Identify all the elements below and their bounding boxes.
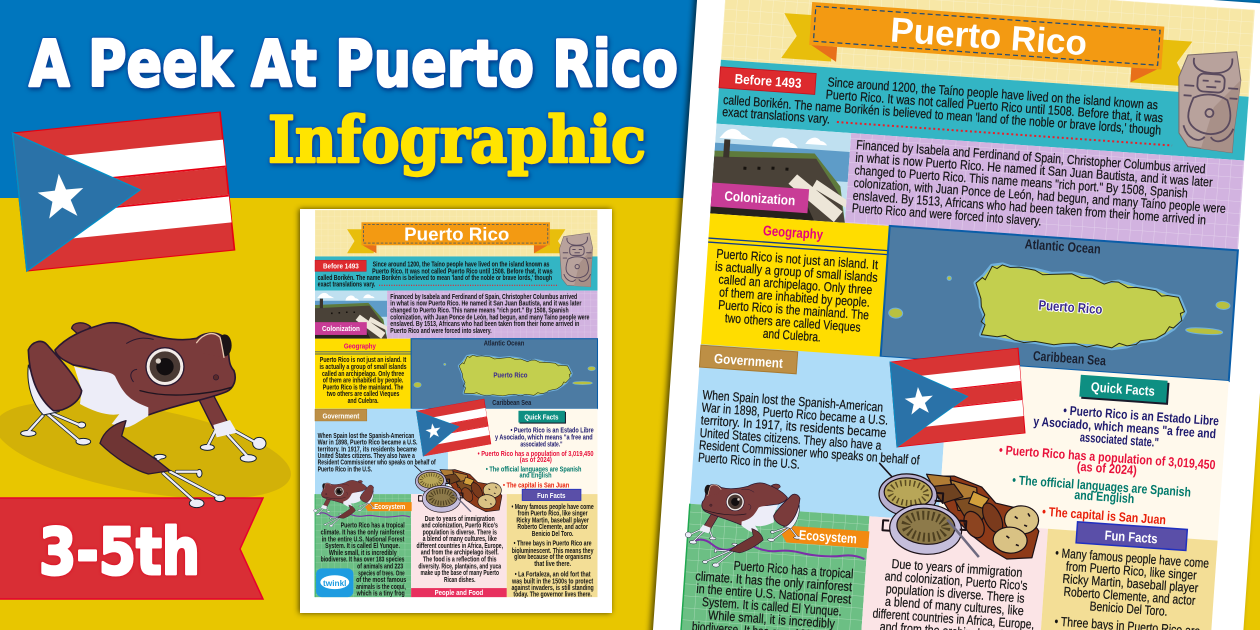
thumbnail people and food text: a blend of many cultures, like	[423, 536, 497, 543]
grade label: 3-5th	[39, 516, 200, 590]
text: colonization: changed to Puerto Rico. This name means "rich port." By 1508, Spanish	[854, 162, 1188, 201]
frog on poster	[683, 478, 804, 573]
text: people and food: Due to years of immigration	[891, 556, 1023, 580]
thumbnail before 1493 text	[318, 262, 553, 288]
thumbnail quick facts text	[478, 428, 594, 489]
thumbnail section labels: twinkl	[323, 578, 347, 588]
thumbnail ecosystem text: animals is the coquí,	[356, 584, 406, 591]
text: before 1493: exact translations vary.	[722, 104, 831, 127]
thumbnail section labels: Ecosystem	[374, 502, 405, 511]
thumbnail geography text: Puerto Rico is the mainland. The	[323, 384, 403, 391]
panel: geography	[701, 213, 890, 358]
thumbnail before 1493 text: Puerto Rico. It was not called Puerto Rico until 1508. Before that, it was	[372, 268, 553, 275]
header ribbon	[781, 0, 1193, 87]
label box: colonization	[711, 182, 809, 213]
icon: Puerto Rico flag	[12, 112, 234, 271]
label: before 1493: Before 1493	[734, 71, 802, 91]
label: fun facts: Fun Facts	[1104, 528, 1158, 546]
thumbnail colonization text: Financed by Isabela and Ferdinand of Spain, Christopher Columbus arrived	[390, 294, 577, 301]
thumbnail section labels: Before 1493	[323, 261, 359, 270]
text: quick facts: • The capital is San Juan	[1042, 504, 1166, 527]
thumbnail ecosystem text: Puerto Rico has a tropical	[341, 523, 405, 530]
text: quick facts: associated state."	[1079, 429, 1159, 450]
poster title text: Puerto Rico	[889, 11, 1088, 63]
thumbnail people and food text	[416, 516, 503, 584]
text: quick facts: • The official languages are Spanish	[1012, 472, 1191, 500]
text: before 1493: called Borikén. The name Borikén is believed to mean 'land of the noble or brave lords,' though	[723, 92, 1162, 138]
thumbnail ecosystem text: species of trees. One	[358, 570, 405, 577]
thumbnail fun facts text: Benicio Del Toro.	[532, 531, 573, 538]
thumbnail section labels: Geography	[344, 341, 377, 350]
thumbnail quick facts text: • The capital is San Juan	[503, 482, 569, 489]
text: fun facts	[1050, 545, 1210, 630]
panel: header background	[721, 0, 1255, 97]
map: small islands	[889, 273, 1230, 341]
thumbnail ecosystem text: which is a tiny frog	[356, 591, 405, 598]
text: before 1493	[722, 67, 1165, 150]
thumbnail ecosystem text	[321, 523, 406, 598]
label box: quick facts	[1079, 375, 1170, 405]
thumbnail government text: Puerto Rico in the U.S.	[318, 466, 372, 473]
label box: ecosystem	[780, 525, 869, 548]
red dotted divider	[837, 122, 1172, 145]
thumbnail geography text: and Culebra.	[348, 398, 379, 405]
thumbnail before 1493 text: called Borikén. The name Borikén is believed to mean 'land of the noble or brave lords,' though	[318, 275, 552, 282]
thumbnail colonization text: enslaved. By 1513, Africans who had been taken from their home arrived in	[390, 321, 579, 328]
thumbnail map labels: Puerto Rico	[493, 371, 528, 380]
text: quick facts: and English	[1074, 487, 1135, 506]
thumbnail geography text: Puerto Rico is not just an island. It	[320, 357, 407, 364]
thumbnail colonization text: in what is now Puerto Rico. He named it San Juan Bautista, and it was later	[390, 301, 582, 308]
text: colonization: Puerto Rico and were forced into slavery.	[851, 200, 1042, 229]
panel: people and food	[857, 516, 1048, 630]
thumbnail quick facts text: • Puerto Rico is an Estado Libre	[510, 428, 594, 435]
thumbnail people and food text: and from the archipelago itself.	[421, 550, 499, 557]
text: geography: Puerto Rico is not just an island. It	[716, 246, 879, 272]
subtitle: Infographic: Infographic	[268, 103, 646, 178]
thumbnail fun facts text: glow because of the organisms	[514, 554, 591, 561]
wavy divider	[690, 539, 865, 560]
text: ecosystem	[691, 555, 854, 630]
text: fun facts: from Puerto Rico, like singer	[1065, 559, 1198, 583]
text: geography: and Culebra.	[762, 326, 821, 345]
thumbnail quick facts text: and English	[520, 472, 552, 479]
thumbnail geography text	[320, 357, 407, 405]
label box: fun facts	[1076, 522, 1187, 550]
thumbnail government text	[318, 433, 436, 473]
map labels: Atlantic Ocean	[1024, 236, 1101, 257]
thumbnail people and food text: The food is a reflection of this	[423, 556, 497, 563]
map: main island	[972, 263, 1187, 354]
panel: quick facts	[938, 361, 1229, 541]
map labels: Caribbean Sea	[1033, 348, 1107, 368]
thumbnail before 1493 text: exact translations vary.	[318, 281, 375, 288]
text: ecosystem: System. It is called El Yunque.	[702, 594, 842, 619]
text: geography: called an archipelago. Only three	[718, 272, 873, 297]
text: geography: is actually a group of small islands	[714, 259, 879, 285]
text: quick facts: • Puerto Rico has a population of 3,019,450	[998, 442, 1216, 472]
thumbnail map labels: Atlantic Ocean	[484, 339, 524, 348]
text: fun facts: Benicio Del Toro.	[1089, 598, 1168, 619]
thumbnail geography text: two others are called Vieques	[327, 391, 399, 398]
text: people and food: a blend of many cultures, like	[885, 594, 1024, 618]
thumbnail poster	[314, 210, 597, 599]
thumbnail quick facts text: (as of 2024)	[520, 457, 552, 464]
thumbnail ecosystem text: of the most famous	[356, 577, 406, 584]
thumbnail ecosystem text: While small, it is incredibly	[329, 550, 397, 557]
thumbnail fun facts text: Roberto Clemente, and actor	[517, 524, 588, 531]
thumbnail government text: Resident Commissioner who speaks on behalf of	[318, 460, 436, 467]
food illustration	[873, 463, 1043, 562]
panel: before 1493	[716, 60, 1249, 161]
heading: geography: Geography	[763, 222, 824, 242]
text: government	[698, 387, 924, 480]
thumbnail title text: Puerto Rico	[404, 223, 509, 244]
label box: government	[699, 345, 798, 374]
thumbnail government text: territory. In 1917, its residents became	[318, 446, 417, 453]
flag on poster	[890, 348, 1025, 447]
thumbnail government text: War in 1898, Puerto Rico became a U.S.	[318, 440, 418, 447]
text: government: Resident Commissioner who speaks on behalf of	[698, 437, 920, 468]
thumbnail people and food text: Due to years of immigration	[425, 516, 495, 523]
thumbnail ecosystem text: of animals and 223	[357, 563, 403, 570]
label box: before 1493	[719, 67, 816, 94]
thumbnail colonization text: colonization, with Juan Ponce de León, had begun, and many Taíno people were	[390, 314, 590, 321]
thumbnail government text: United States citizens. They also have a	[318, 453, 415, 460]
thumbnail fun facts text: • Many famous people have come	[512, 504, 594, 511]
text: people and food: and colonization, Puerto Rico's	[884, 568, 1028, 593]
thumbnail fun facts text: against invaders, is still standing	[512, 585, 594, 592]
panel: fun facts	[1035, 529, 1218, 630]
map labels: Puerto Rico	[1038, 298, 1103, 317]
thumbnail section labels: People and Food	[435, 588, 483, 597]
thumbnail map labels: Caribbean Sea	[492, 398, 532, 407]
thumbnail geography text: of them are inhabited by people.	[323, 378, 403, 385]
text: colonization	[851, 137, 1229, 241]
thumbnail people and food text: different countries in Africa, Europe,	[416, 543, 503, 550]
text: people and food: population is diverse. There is	[885, 581, 1026, 606]
thumbnail fun facts text: Ricky Martin, baseball player	[516, 517, 589, 524]
thumbnail colonization text	[390, 294, 590, 335]
panel: ecosystem	[676, 504, 869, 630]
banner: grade	[0, 498, 263, 599]
thumbnail fun facts text: today. The governor lives there.	[513, 592, 592, 599]
text: fun facts: • Many famous people have come	[1055, 545, 1210, 571]
label: colonization: Colonization	[724, 188, 796, 208]
text: geography: of them are inhabited by people.	[719, 284, 870, 310]
text: fun facts: Ricky Martin, baseball player	[1062, 571, 1199, 595]
panel: government	[690, 344, 949, 521]
text: quick facts: y Asociado, which means "a free and	[1033, 414, 1217, 441]
text: government: When Spain lost the Spanish-American	[702, 387, 884, 415]
thumbnail section labels: Government	[322, 411, 360, 420]
main title: A Peek At Puerto Rico	[29, 28, 678, 102]
large poster	[674, 0, 1255, 630]
text: geography: Puerto Rico is the mainland. The	[718, 297, 870, 323]
thumbnail ecosystem text: biodiverse. It has over 183 species	[321, 557, 405, 564]
thumbnail people and food text: Rican dishes.	[444, 577, 476, 584]
thumbnail people and food text: and colonization, Puerto Rico's	[422, 523, 498, 530]
text: quick facts	[994, 398, 1219, 531]
thumbnail fun facts text	[511, 504, 594, 599]
thumbnail geography text: is actually a group of small islands	[320, 364, 407, 371]
thumbnail colonization text: changed to Puerto Rico. This name means "rich port." By 1508, Spanish	[390, 308, 569, 315]
thumbnail people and food text: make up the base of many Puerto	[420, 570, 499, 577]
text: government: Puerto Rico in the U.S.	[698, 450, 800, 472]
thumbnail map labels	[484, 339, 532, 407]
thumbnail ecosystem text: System. It is called El Yunque.	[325, 543, 400, 550]
icon: coqui frog	[21, 323, 266, 508]
text: geography	[710, 246, 879, 348]
thumbnail quick facts text: associated state."	[520, 441, 563, 448]
thumbnail section labels: Colonization	[322, 324, 360, 333]
thumbnail quick facts text: • Puerto Rico has a population of 3,019,450	[478, 451, 594, 458]
thumbnail fun facts text: • Three bays in Puerto Rico are	[514, 540, 592, 547]
text: ecosystem: in the entire U.S. National Forest	[696, 581, 852, 607]
big tilted page sheet	[645, 0, 1260, 630]
map labels	[1017, 236, 1115, 368]
statue: Taino carving	[1174, 48, 1243, 153]
thumbnail page sheet	[300, 209, 612, 613]
thumbnail fun facts text: bioluminescent. This means they	[512, 548, 594, 555]
thumbnail fun facts text: that live there.	[534, 561, 571, 568]
panel: map	[881, 226, 1238, 381]
thumbnail section labels: Quick Facts	[524, 412, 559, 421]
geography divider lines	[708, 238, 888, 255]
thumbnail section labels: Fun Facts	[537, 491, 565, 500]
thumbnail quick facts text: • The official languages are Spanish	[486, 467, 581, 474]
thumbnail section labels	[322, 261, 565, 597]
thumbnail colonization text: Puerto Rico and were forced into slavery.	[390, 328, 492, 335]
text: ecosystem: climate. It has the only rainforest	[695, 568, 853, 594]
text: ecosystem: Puerto Rico has a tropical	[733, 558, 854, 581]
text: government: United States citizens. They also have a	[699, 425, 883, 453]
thumbnail fun facts text: was built in the 1500s to protect	[511, 578, 594, 585]
thumbnail fun facts text: • La Fortaleza, an old fort that	[515, 571, 591, 578]
image: fort	[710, 124, 851, 223]
thumbnail ecosystem text: in the entire U.S. National Forest	[322, 536, 405, 543]
thumbnail people and food text: population is diverse. There is	[423, 529, 497, 536]
label: government: Government	[714, 351, 784, 371]
panel: colonization	[845, 133, 1244, 250]
text: quick facts: (as of 2024)	[1076, 459, 1137, 478]
thumbnail quick facts text: y Asociado, which means "a free and	[495, 435, 593, 442]
thumbnail people and food text: diversity. Rice, plantains, and yuca	[418, 563, 501, 570]
text: government: territory. In 1917, its residents became	[700, 412, 887, 440]
text: government: War in 1898, Puerto Rico became a U.S.	[701, 400, 889, 428]
text: fun facts: Roberto Clemente, and actor	[1063, 584, 1196, 608]
text: geography: two others are called Vieques	[724, 310, 862, 335]
text: quick facts: • Puerto Rico is an Estado Libre	[1063, 403, 1219, 428]
text: before 1493: Since around 1200, the Taíno people have lived on the island known as	[827, 74, 1159, 112]
thumbnail government text: When Spain lost the Spanish-American	[318, 433, 414, 440]
thumbnail fun facts text: from Puerto Rico, like singer	[518, 511, 588, 518]
label: ecosystem: Ecosystem	[798, 527, 857, 546]
label: quick facts: Quick Facts	[1090, 379, 1155, 399]
thumbnail before 1493 text: Since around 1200, the Taíno people have lived on the island known as	[373, 262, 550, 269]
text: people and food	[871, 555, 1038, 630]
text: before 1493: Puerto Rico. It was not called Puerto Rico until 1508. Before that, it was	[825, 87, 1164, 125]
thumbnail geography text: called an archipelago. Only three	[322, 371, 404, 378]
frog ground shadow	[0, 383, 298, 517]
thumbnail ecosystem text: climate. It has the only rainforest	[321, 530, 405, 537]
